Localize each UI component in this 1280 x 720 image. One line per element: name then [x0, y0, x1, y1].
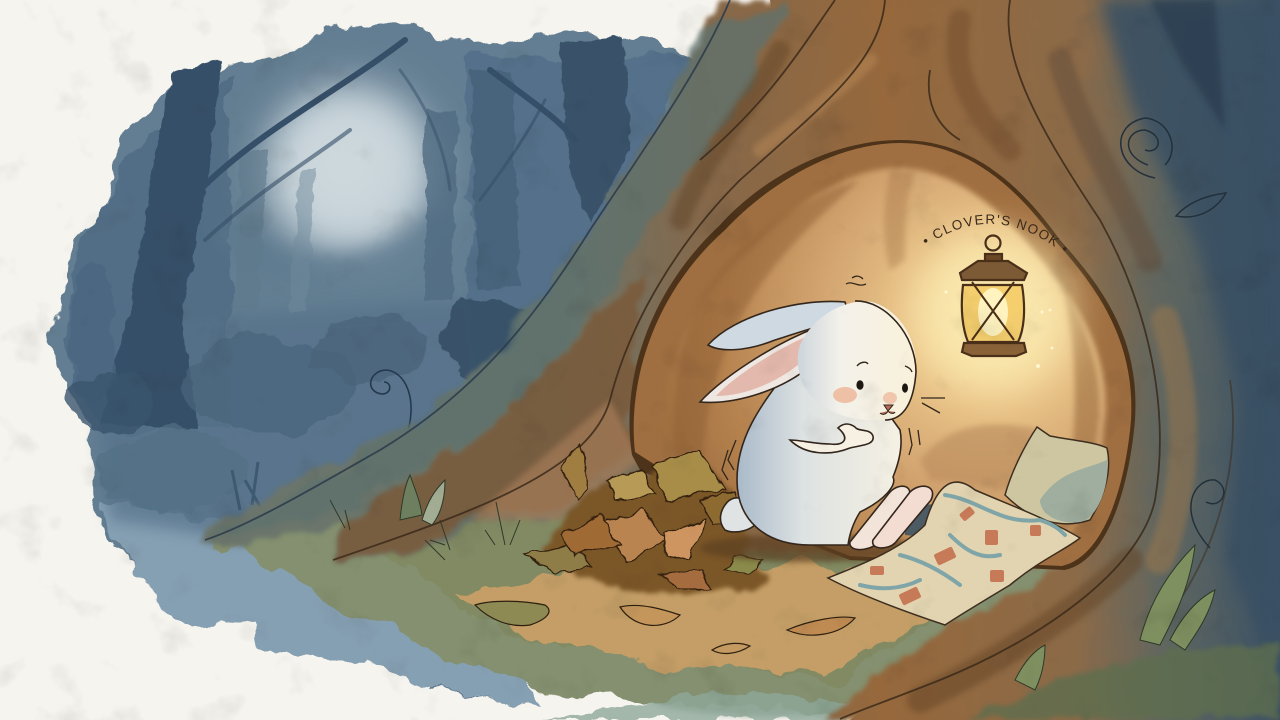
inner streaks	[674, 180, 860, 480]
motion marks	[722, 276, 945, 480]
rabbit	[700, 301, 933, 550]
rabbit eyes	[856, 380, 908, 393]
pillow	[1005, 427, 1109, 524]
rabbit shadow	[700, 534, 920, 562]
rabbit head	[798, 301, 916, 420]
background trees	[100, 38, 632, 430]
right swirl and leaf	[1121, 118, 1226, 548]
bushes	[65, 260, 536, 508]
rabbit nose	[880, 405, 895, 414]
rabbit body	[737, 360, 901, 545]
rabbit feet	[850, 486, 910, 550]
root brown	[333, 270, 640, 560]
rabbit far cheek	[883, 392, 897, 404]
rabbit head outline	[855, 301, 916, 420]
rabbit ear front	[700, 327, 818, 402]
grass	[330, 475, 1215, 690]
fallen leaves	[475, 601, 855, 653]
rabbit arms and paws	[790, 424, 873, 453]
rabbit tail	[720, 498, 758, 532]
bark wash left	[215, 0, 790, 538]
moon glow	[265, 85, 435, 255]
lantern halo	[915, 234, 1071, 390]
foreground green	[960, 640, 1280, 720]
rabbit cheeks	[833, 387, 857, 403]
rabbit ear back	[708, 301, 850, 350]
rabbit far foot	[873, 486, 933, 548]
back wall shadow	[920, 424, 1040, 490]
bark streaks	[680, 20, 1183, 700]
tree hollow	[629, 140, 1135, 570]
fern curl	[232, 370, 411, 510]
branches	[200, 40, 575, 240]
icon: lantern	[944, 236, 1053, 368]
leaf pile	[525, 445, 762, 592]
ground	[205, 480, 1080, 720]
blanket	[828, 482, 1080, 625]
sign: Clover's Nook: • CLOVER'S NOOK •	[924, 214, 1066, 251]
trunk right shadow	[1100, 0, 1280, 680]
forest wash	[45, 25, 700, 700]
rabbit brows	[857, 362, 912, 372]
dark cloth under feet	[905, 504, 948, 536]
